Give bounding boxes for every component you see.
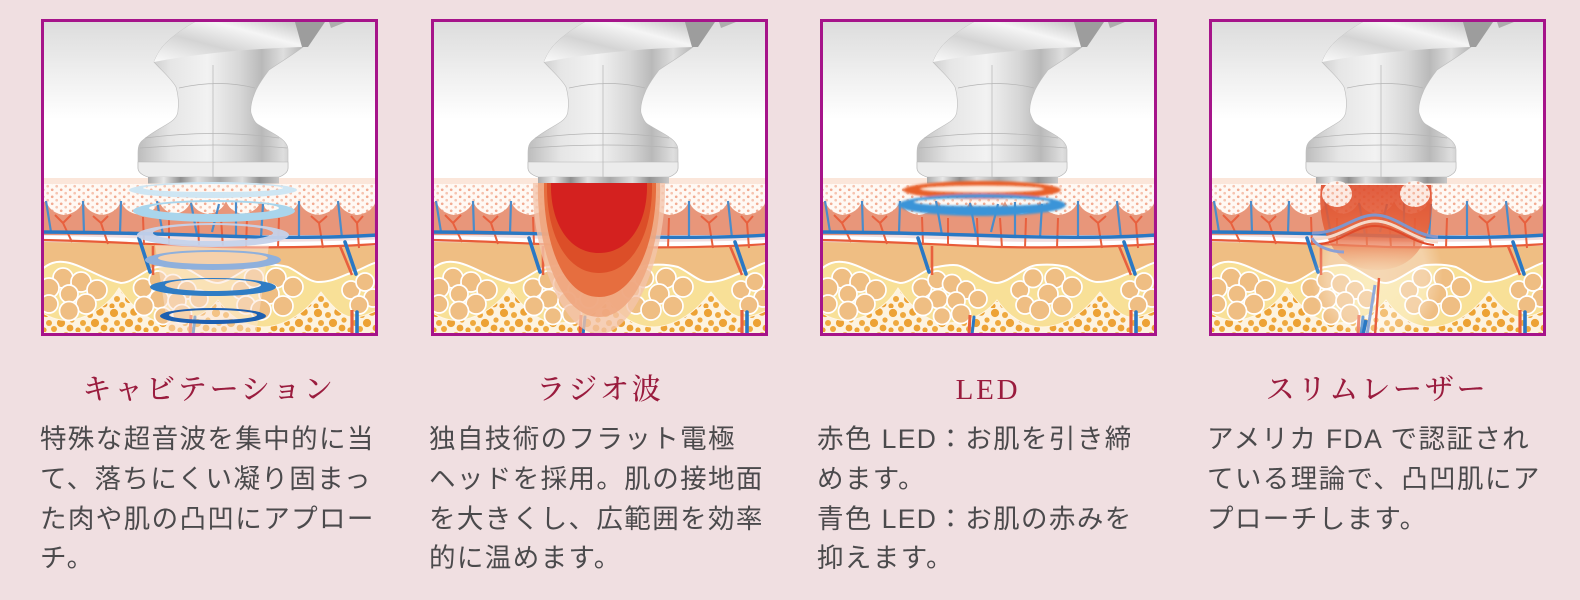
- panel: LED illustration: [820, 19, 1157, 336]
- heading: LED: LED: [956, 374, 1020, 406]
- panel: radio frequency illustration: [431, 19, 768, 336]
- panel: cavitation illustration: [41, 19, 378, 336]
- text block: LED: 青色 LED：お肌の赤みを: [817, 504, 1133, 534]
- text block: slim laser: ている理論で、凸凹肌にア: [1207, 464, 1541, 494]
- text block: cavitation: [40, 424, 375, 573]
- text block: radio frequency: 的に温めます。: [429, 543, 622, 573]
- laser pale glow: [1311, 203, 1443, 347]
- text block: cavitation: た肉や肌の凸凹にアプロー: [40, 504, 375, 534]
- text block: LED: 赤色 LED：お肌を引き締: [817, 424, 1133, 454]
- ultrasound rings: [129, 182, 297, 324]
- text block: LED: めます。: [817, 464, 926, 494]
- text block: cavitation: 特殊な超音波を集中的に当: [40, 424, 375, 454]
- laser red zone: [1320, 185, 1432, 270]
- radio frequency heat zones: [533, 183, 665, 334]
- text block: radio frequency: [429, 424, 764, 573]
- text block: LED: [817, 424, 1133, 573]
- text block: radio frequency: ヘッドを採用。肌の接地面: [429, 464, 764, 494]
- panel: slim laser illustration: [1209, 19, 1546, 336]
- text block: radio frequency: 独自技術のフラット電極: [429, 424, 736, 454]
- LED rings: [898, 181, 1066, 216]
- text block: radio frequency: を大きくし、広範囲を効率: [429, 504, 764, 534]
- text block: cavitation: て、落ちにくい凝り固まっ: [40, 464, 372, 494]
- heading: radio frequency: ラジオ波: [536, 374, 664, 406]
- LED inner glow: [918, 185, 1046, 193]
- text block: slim laser: プローチします。: [1207, 504, 1428, 534]
- heading: cavitation: キャビテーション: [82, 374, 336, 406]
- text block: slim laser: アメリカ FDA で認証され: [1207, 424, 1530, 454]
- text block: cavitation: チ。: [40, 543, 94, 573]
- text block: LED: 抑えます。: [817, 543, 954, 573]
- cone of ultrasound: [155, 245, 269, 335]
- scallops in laser zone: [1322, 181, 1430, 207]
- heading: slim laser: スリムレーザー: [1266, 374, 1488, 406]
- pushed-up skin vessels: [1312, 215, 1438, 335]
- text block: slim laser: [1207, 424, 1541, 534]
